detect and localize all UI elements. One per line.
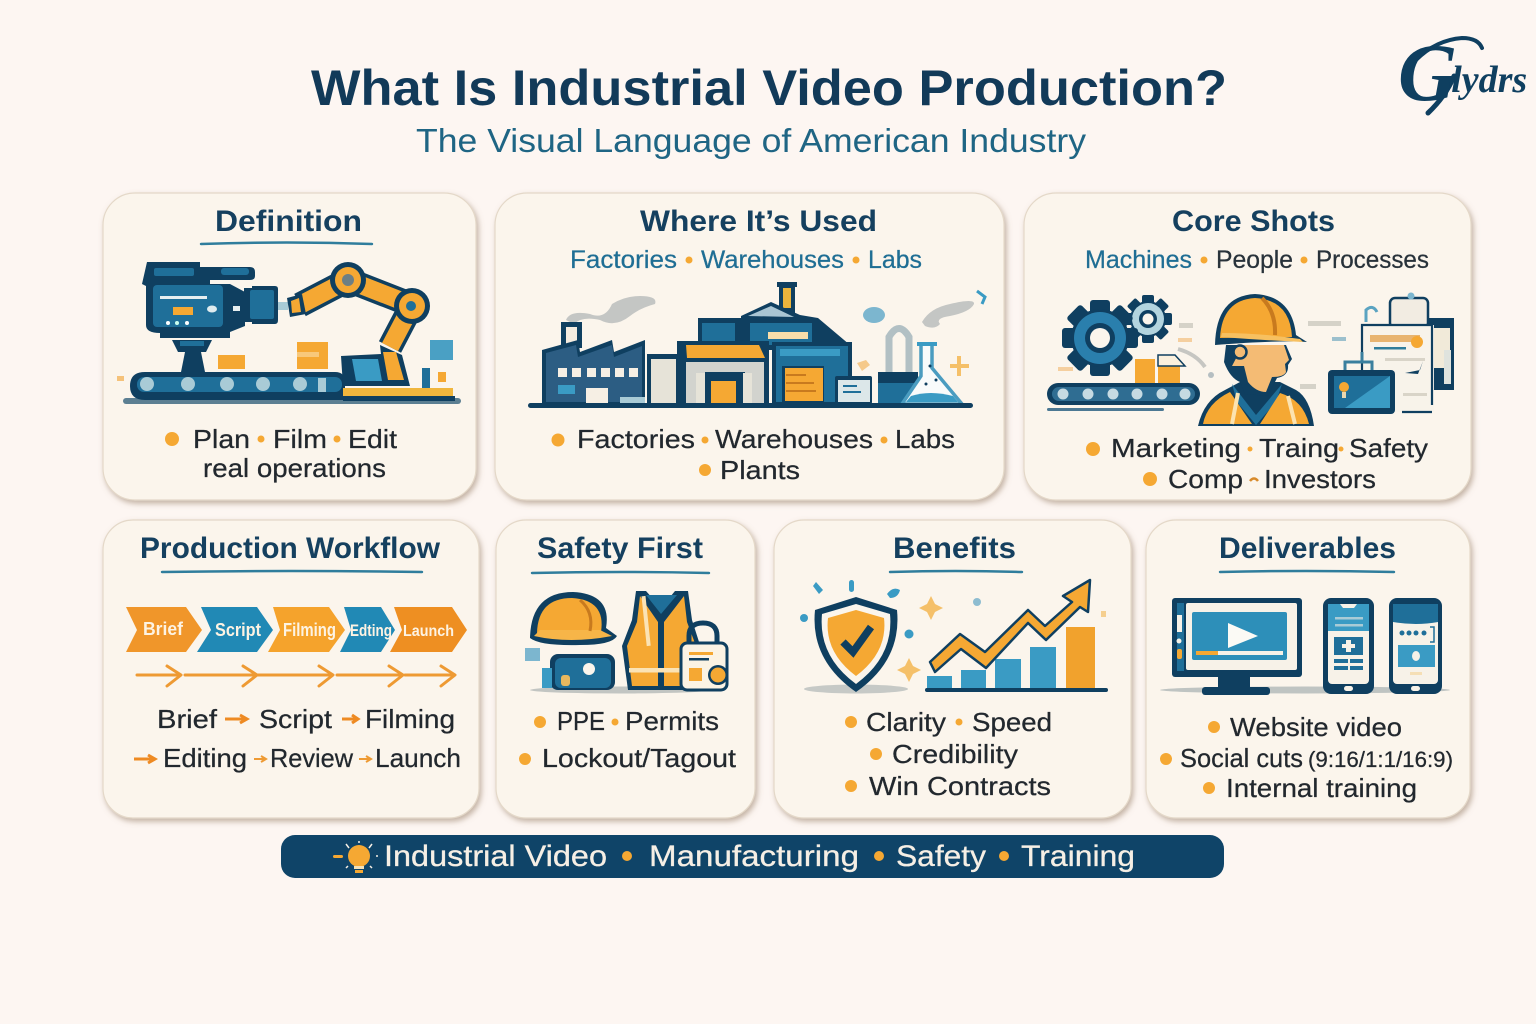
text: benefits list: Speed <box>972 707 1052 737</box>
text: workflow steps: Filming <box>365 704 455 734</box>
heading: Deliverables: Deliverables <box>1219 532 1396 565</box>
illustration: gears, conveyor, worker, documents <box>1047 292 1454 426</box>
panel: Safety First <box>496 520 755 818</box>
text: Plan, Film, Edit <box>165 424 398 483</box>
text: locations: Warehouses <box>715 424 873 454</box>
chevron process: Brief to Launch: Filming <box>283 620 336 640</box>
heading: Core Shots: Core Shots <box>1172 205 1335 238</box>
chevron process: Brief to Launch: Launch <box>403 623 454 640</box>
subtitle: The Visual Language of American Industry <box>416 122 1087 159</box>
panel: Definition <box>103 193 476 500</box>
subheading: shot subjects <box>1085 246 1429 274</box>
icon: light bulb <box>333 841 378 873</box>
text: deliverables list: Website video <box>1230 712 1402 742</box>
heading: Where It's Used: Where It’s Used <box>640 205 877 238</box>
text: keywords: Industrial Video <box>384 840 607 873</box>
text: deliverables list <box>1160 712 1453 803</box>
subheading: places: Labs <box>868 246 922 274</box>
chevron process: Brief to Launch: Script <box>215 620 261 640</box>
logo: Glydrs signature <box>1398 27 1527 118</box>
text: deliverables list: (9:16/1:1/16:9) <box>1308 747 1453 772</box>
panel: Production Workflow <box>103 520 479 818</box>
illustration: camera on conveyor with robot arm <box>117 262 461 404</box>
text: keywords <box>384 840 1135 873</box>
subheading: shot subjects: People <box>1216 246 1293 274</box>
text: keywords: Manufacturing <box>649 840 859 873</box>
text: workflow steps: Editing <box>163 743 247 773</box>
text: workflow steps <box>134 704 461 773</box>
text: Plan, Film, Edit: real operations <box>203 453 386 483</box>
chevron process: Brief to Launch <box>126 607 467 652</box>
text: keywords: Safety <box>896 840 986 873</box>
illustration: PPE helmet, vest, lock <box>525 591 728 694</box>
illustration: shield and growth chart <box>800 580 1108 694</box>
text: workflow steps: Script <box>259 704 333 734</box>
text: deliverables list: Internal training <box>1226 773 1417 803</box>
text: uses: Safety <box>1349 433 1428 463</box>
chevron process: Brief to Launch: Edting <box>350 621 392 640</box>
banner: keywords <box>281 835 1224 878</box>
text: uses: Traing <box>1259 433 1339 463</box>
panel: Core Shots <box>1024 193 1471 500</box>
text: uses: Investors <box>1264 464 1376 494</box>
logo: Glydrs signature: lydrs <box>1451 59 1527 101</box>
panel: Benefits <box>774 520 1131 818</box>
subheading: places <box>570 246 922 274</box>
text: locations: Labs <box>895 424 955 454</box>
text: benefits list <box>845 707 1052 801</box>
text: locations: Factories <box>577 424 695 454</box>
text: Plan, Film, Edit: Plan <box>193 424 250 454</box>
text: safety items <box>519 706 737 773</box>
illustration: factory, warehouse and lab <box>528 282 985 408</box>
heading: Safety First: Safety First <box>537 532 703 565</box>
text: benefits list: Credibility <box>892 739 1018 769</box>
text: safety items: PPE <box>557 706 605 736</box>
text: keywords: Training <box>1021 840 1135 873</box>
text: uses: Marketing <box>1111 433 1241 463</box>
text: uses <box>1086 433 1428 494</box>
illustration: monitor and phones <box>1160 598 1450 695</box>
text: locations: Plants <box>720 455 800 485</box>
subheading: places: Factories <box>570 246 677 274</box>
subheading: shot subjects: Machines <box>1085 246 1192 274</box>
title: What Is Industrial Video Production? <box>311 60 1227 116</box>
heading: Definition: Definition <box>215 205 362 238</box>
subheading: shot subjects: Processes <box>1316 246 1429 274</box>
text: locations <box>552 424 955 485</box>
heading: Production Workflow: Production Workflow <box>140 532 441 565</box>
text: safety items: Lockout/Tagout <box>542 743 737 773</box>
text: uses: Comp <box>1168 464 1243 494</box>
text: workflow steps: Launch <box>375 743 461 773</box>
logo: Glydrs signature: G <box>1398 27 1457 118</box>
subheading: places: Warehouses <box>701 246 844 274</box>
heading: Benefits: Benefits <box>893 532 1016 565</box>
arrows row <box>137 666 455 686</box>
text: Plan, Film, Edit: Film <box>273 424 327 454</box>
text: safety items: Permits <box>625 706 719 736</box>
panel: Deliverables <box>1146 520 1470 818</box>
text: benefits list: Clarity <box>866 707 946 737</box>
text: deliverables list: Social cuts <box>1180 743 1303 773</box>
text: Plan, Film, Edit: Edit <box>348 424 398 454</box>
text: workflow steps: Brief <box>157 704 218 734</box>
chevron process: Brief to Launch: Brief <box>143 619 184 639</box>
text: benefits list: Win Contracts <box>869 771 1051 801</box>
text: workflow steps: Review <box>270 743 353 773</box>
panel: Where It's Used <box>495 193 1004 500</box>
